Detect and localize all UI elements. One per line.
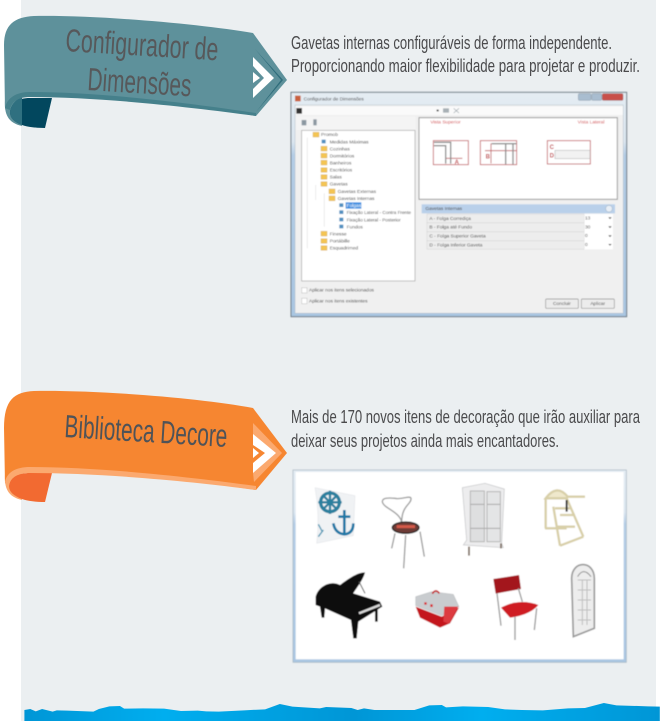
item: arched door	[572, 565, 594, 637]
properties table: A - Folga Corrediça	[429, 216, 471, 222]
tree panel: Banheiros	[330, 160, 352, 166]
item: red chair	[493, 575, 538, 640]
tree panel	[296, 117, 416, 281]
preview panel with drawer diagrams: B	[486, 155, 491, 161]
properties table: C - Folga Superior Gaveta	[429, 234, 486, 240]
properties table: Gavetas Internas	[425, 206, 463, 212]
checkbox options: Aplicar nos itens selecionados	[309, 288, 375, 294]
tree panel: Fundos	[347, 224, 363, 230]
tree panel: Fixação Lateral - Posterior	[347, 217, 401, 223]
preview panel with drawer diagrams: A	[455, 160, 460, 166]
ribbon title: Dimensões	[87, 61, 193, 103]
properties table: 30	[585, 224, 591, 230]
tree panel: Escritórios	[330, 168, 353, 174]
item: high chair	[545, 490, 585, 546]
ribbon title	[65, 22, 219, 103]
tree panel: Medidas Máximas	[330, 139, 369, 145]
description: Biblioteca Decore: deixar seus projetos ainda mais encantadores.	[291, 431, 559, 451]
tree panel: Esquadrimed	[330, 246, 358, 252]
checkbox options: Aplicar nos itens existentes	[309, 298, 368, 304]
tree panel: Folgas	[347, 203, 362, 209]
preview panel with drawer diagrams	[419, 118, 617, 199]
properties table: B - Folga até Fundo	[429, 225, 472, 231]
properties table	[422, 204, 615, 249]
icon: double chevron	[253, 49, 283, 112]
window title bar: Configurador de Dimensões	[304, 96, 364, 102]
ribbon title: Biblioteca Decore	[64, 408, 228, 454]
item: anchor cushion	[315, 488, 355, 543]
dialog buttons	[546, 299, 614, 308]
toolbar	[296, 106, 623, 115]
description: Biblioteca Decore	[291, 407, 641, 451]
tree panel: Cozinhas	[330, 146, 350, 152]
dialog buttons: Concluir	[553, 301, 571, 307]
tree panel: Finesse	[330, 231, 347, 237]
dialog buttons: Aplicar	[590, 301, 605, 307]
item: wire chair	[382, 497, 424, 568]
preview panel with drawer diagrams: C	[550, 145, 555, 151]
description: Configurador de Dimensões	[291, 33, 640, 76]
properties table: 0	[585, 233, 588, 239]
screenshot: configurator window	[291, 92, 627, 317]
window title bar	[295, 94, 623, 102]
item: grand piano	[316, 572, 382, 638]
tree panel: Salas	[330, 175, 342, 181]
footer water band	[24, 703, 660, 721]
tree panel: Gavetas	[330, 182, 348, 188]
screenshot: decor library window	[293, 470, 626, 662]
checkbox options	[302, 288, 375, 304]
preview panel with drawer diagrams: Vista Superior	[430, 120, 461, 126]
tree panel: Gavetas Internas	[338, 196, 375, 202]
ribbon: Biblioteca Decore	[4, 391, 287, 502]
item: pet carrier	[416, 591, 459, 628]
tree panel: Gavetas Externas	[338, 189, 377, 195]
properties table: 13	[585, 215, 591, 221]
item: white cabinet	[462, 483, 504, 556]
tree panel: Fixação Lateral - Contra Frente	[347, 210, 411, 216]
preview panel with drawer diagrams: D	[550, 154, 555, 160]
preview panel with drawer diagrams: Vista Lateral	[578, 120, 604, 126]
ribbon title: Configurador de	[65, 22, 219, 67]
tree panel: Dormitórios	[330, 153, 355, 159]
tree panel: Portábille	[330, 239, 350, 245]
properties table: D - Folga Inferior Gaveta	[429, 243, 483, 249]
ribbon: Configurador de Dimensões	[4, 16, 287, 128]
icon: double chevron	[253, 423, 282, 482]
tree panel: Promob	[321, 132, 338, 138]
properties table: 0	[585, 242, 588, 248]
